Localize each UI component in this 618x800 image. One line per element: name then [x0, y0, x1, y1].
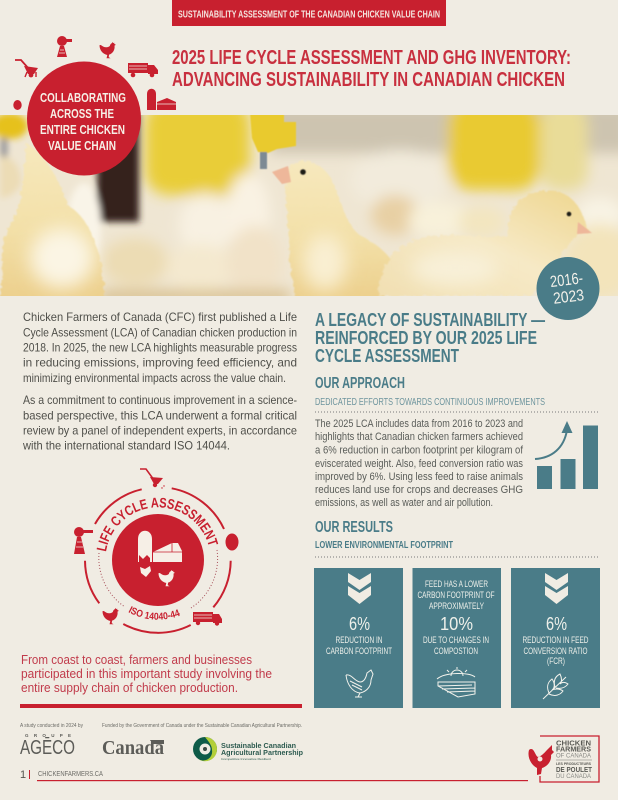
approach body text: improved by 6%. Using less feed to raise animals [315, 471, 523, 483]
approach body text [315, 418, 523, 509]
icon: wheelbarrow [15, 60, 38, 77]
panel: feed conversion ratio: (FCR) [547, 656, 565, 666]
page number and url: CHICKENFARMERS.CA [38, 771, 103, 778]
icon: wheat [543, 674, 568, 699]
badge: 2016-2023 [536, 257, 600, 320]
left chick [0, 143, 104, 300]
intro text: As a commitment to continuous improvement in a science- [23, 393, 297, 407]
icon: hen outline [346, 670, 373, 697]
panel: carbon footprint: REDUCTION IN [336, 635, 382, 645]
heading: legacy: REINFORCED BY OUR 2025 LIFE [315, 327, 537, 348]
icon: windmill [74, 527, 93, 554]
callout: collaborating circle: VALUE CHAIN [48, 138, 116, 153]
panel: feed composition: 10% [440, 614, 473, 634]
life cycle assessment badge: ISO 14040-44 [128, 606, 180, 620]
footer credits: Funded by the Government of Canada under the Sustainable Canadian Agricultural Partnership. [102, 723, 302, 729]
life cycle assessment badge: LIFE CYCLE ASSESSMENT [96, 498, 218, 552]
main chick [285, 162, 396, 300]
panel: feed composition: COMPOSTION [434, 646, 478, 656]
logo: Sustainable Canadian Agricultural Partnership: Agricultural Partnership [221, 748, 303, 757]
icon: silo and barn [147, 89, 176, 110]
logo: Chicken Farmers of Canada: FARMERS [556, 746, 591, 754]
intro text: review by a panel of independent experts, in accordance [23, 424, 297, 438]
icon: rising bar chart [535, 421, 598, 489]
logo: Chicken Farmers of Canada: CHICKEN [556, 740, 591, 748]
callout: collaborating circle: COLLABORATING [40, 90, 126, 105]
intro text: minimizing environmental impacts across the value chain. [23, 371, 286, 385]
ring segments [85, 488, 231, 633]
panel: carbon footprint [314, 568, 403, 708]
farm pictogram [138, 531, 182, 586]
panel: feed conversion ratio [511, 568, 600, 708]
icon: down chevrons [545, 573, 568, 604]
icon: egg [13, 100, 22, 110]
badge: 2016-2023: 2016- [549, 270, 584, 291]
approach body text: a 6% reduction in carbon footprint per kilogram of [315, 444, 523, 456]
drinker nipple [250, 113, 296, 153]
panel: carbon footprint: 6% [349, 614, 370, 634]
heading: legacy [315, 309, 545, 366]
logo: Sustainable Canadian Agricultural Partnership: Sustainable Canadian [221, 741, 296, 750]
badge: 2016-2023: 2023 [552, 287, 585, 308]
intro text: Cycle Assessment (LCA) of Canadian chicken production in [23, 326, 297, 340]
intro text: Chicken Farmers of Canada (CFC) first published a Life [23, 310, 297, 324]
logo: Groupe AGECO: G R O U P E [25, 733, 71, 738]
logo: Chicken Farmers of Canada: OF CANADA [556, 754, 591, 760]
logo: Sustainable Canadian Agricultural Partnership [193, 737, 303, 761]
closing statement: participated in this important study involving the [21, 666, 272, 681]
photo: chicks at a drinker [0, 115, 618, 296]
icon: egg [226, 534, 238, 550]
panel: feed composition: APPROXIMATELY [429, 601, 484, 611]
panel: feed conversion ratio: 6% [546, 614, 567, 634]
logo: Sustainable Canadian Agricultural Partnership: Competitive Innovative Resilient [221, 757, 271, 761]
icon: wheelbarrow [140, 469, 165, 489]
right chick [378, 190, 588, 296]
logo: Chicken Farmers of Canada: LES PRODUCTEURS [556, 761, 591, 766]
icon: hen [100, 42, 116, 58]
icon: fields and sun [437, 667, 475, 697]
value chain icons [13, 36, 176, 110]
red rule [20, 704, 302, 708]
page number and url: 1 [20, 769, 26, 781]
header tab [172, 0, 446, 26]
approach body text: The 2025 LCA includes data from 2016 to 2023 and [315, 418, 523, 430]
dotted inner ring [99, 550, 218, 608]
logo: Canada wordmark: Canada [102, 737, 164, 759]
panel: carbon footprint: CARBON FOOTPRINT [326, 646, 392, 656]
panel: feed composition: CARBON FOOTPRINT OF [418, 590, 495, 600]
title [172, 46, 571, 91]
arc label [106, 507, 210, 552]
section: our results [315, 519, 600, 557]
callout: collaborating circle [27, 62, 141, 176]
approach body text: highlights that Canadian chicken farmers achieved [315, 431, 523, 443]
approach body text: eviscerated weight. Also, feed conversion ratio was [315, 458, 523, 470]
callout: collaborating circle: ACROSS THE [50, 106, 114, 121]
intro text: based perspective, this LCA underwent a formal critical [23, 408, 297, 422]
page number and url [20, 769, 528, 781]
icon: windmill [57, 36, 72, 57]
callout: collaborating circle: ENTIRE CHICKEN [40, 122, 125, 137]
footer credits: A study conducted in 2024 by [20, 723, 83, 729]
approach body text: emissions, as well as water and air pollution. [315, 497, 493, 509]
icon: truck [128, 63, 158, 77]
closing statement: entire supply chain of chicken production. [21, 680, 238, 695]
section: our results: LOWER ENVIRONMENTAL FOOTPRINT [315, 540, 453, 551]
centre disc [112, 514, 204, 606]
approach body text: reduces land use for crops and decreases GHG [315, 484, 523, 496]
closing statement: From coast to coast, farmers and businesses [21, 652, 252, 667]
icon: down chevrons [348, 573, 371, 604]
intro text [22, 310, 297, 452]
section: our approach [315, 375, 600, 412]
header tab: SUSTAINABILITY ASSESSMENT OF THE CANADIAN CHICKEN VALUE CHAIN [178, 8, 440, 20]
section: our approach: OUR APPROACH [315, 375, 405, 392]
panel: feed conversion ratio: REDUCTION IN FEED [522, 635, 589, 645]
icon: truck [193, 612, 222, 626]
logo: Chicken Farmers of Canada [528, 736, 599, 782]
icon: hen [103, 608, 119, 624]
orbit icons [74, 469, 238, 626]
closing statement [21, 652, 272, 695]
heading: legacy: A LEGACY OF SUSTAINABILITY — [315, 309, 545, 330]
logo: Chicken Farmers of Canada: DE POULET [556, 767, 593, 774]
logo: Groupe AGECO: AGĒCO [20, 736, 75, 759]
panel: feed composition [412, 568, 501, 708]
panel: feed composition: FEED HAS A LOWER [425, 579, 488, 589]
logo: Groupe AGECO [20, 733, 75, 759]
intro text: 2018. In 2025, the new LCA highlights measurable progress [23, 340, 297, 354]
heading: legacy: CYCLE ASSESSMENT [315, 345, 460, 366]
panel: feed composition: DUE TO CHANGES IN [423, 635, 489, 645]
footer credits [20, 723, 303, 761]
intro text: in reducing emissions, improving feed efficiency, and [23, 356, 297, 370]
logo: Chicken Farmers of Canada: DU CANADA [556, 774, 591, 780]
panel: feed conversion ratio: CONVERSION RATIO [524, 646, 588, 656]
life cycle assessment badge [74, 468, 238, 634]
intro text: with the international standard ISO 14044. [22, 438, 230, 452]
section: our results: OUR RESULTS [315, 519, 393, 536]
